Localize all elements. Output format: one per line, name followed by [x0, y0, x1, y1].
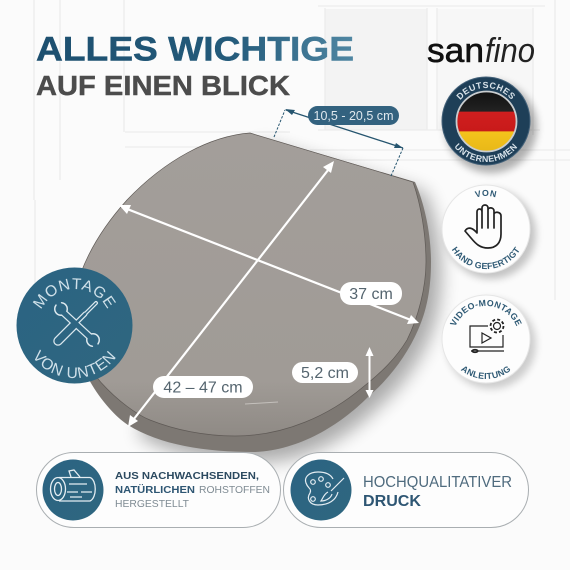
- icon: palette and brush: [306, 472, 344, 505]
- title: AUF EINEN BLICK: [36, 70, 290, 101]
- toilet seat: [72, 133, 441, 462]
- badge: Montage von unten: VON UNTEN: [35, 350, 116, 378]
- label: 42 – 47 cm: [153, 376, 253, 398]
- width dimension arrow: hinge distance: [274, 109, 403, 176]
- label: 37 cm: [340, 282, 402, 305]
- feature pill: Druck: DRUCK: [363, 493, 422, 510]
- pill text: HOCHQUALITATIVER: [363, 474, 512, 491]
- logo: sanfino: fino: [485, 32, 535, 70]
- pill text: NATÜRLICHEN: [115, 485, 195, 496]
- pill text: [115, 471, 270, 510]
- pill text: AUS NACHWACHSENDEN,: [115, 471, 259, 482]
- badge: Video-Montage Anleitung: VIDEO-MONTAGE: [450, 300, 522, 326]
- badge: Video-Montage Anleitung: ANLEITUNG: [460, 366, 510, 379]
- title: [36, 30, 354, 101]
- thickness arrow: [366, 347, 374, 398]
- badge: von Hand gefertigt: HAND GEFERTIGT: [452, 246, 519, 270]
- icon: video with gear: [470, 320, 504, 352]
- badge: von Hand gefertigt: VON: [474, 190, 496, 198]
- badge: Deutsches Unternehmen: DEUTSCHES: [456, 82, 515, 100]
- badge: Montage von unten: MONTAGE: [32, 278, 116, 309]
- badge: Montage von unten: [16, 268, 132, 384]
- logo: sanfino: [427, 32, 535, 70]
- label: 37 cm: 37 cm: [349, 286, 393, 303]
- badge: Deutsches Unternehmen: UNTERNEHMEN: [455, 143, 518, 162]
- badge: Video-Montage Anleitung: [442, 294, 539, 392]
- pill text: HERGESTELLT: [115, 499, 189, 510]
- feature pill: Rohstoffe: [36, 452, 280, 528]
- feature pill: Druck: [284, 452, 528, 528]
- icon: hand: [465, 205, 501, 248]
- icon: log: [50, 470, 95, 501]
- pill text: ROHSTOFFEN: [199, 485, 270, 496]
- label: 5,2 cm: 5,2 cm: [301, 365, 349, 382]
- label: 5,2 cm: [292, 362, 358, 383]
- title: ALLES WICHTIGE: [36, 30, 354, 68]
- logo: sanfino: san: [427, 32, 484, 70]
- badge: Deutsches Unternehmen: [440, 76, 542, 178]
- icon: wrench and screwdriver: [54, 302, 100, 347]
- label: 42 – 47 cm: 42 – 47 cm: [163, 380, 243, 396]
- label: 10,5 - 20,5 cm: 10,5 - 20,5 cm: [314, 108, 394, 123]
- white measurement arrows: [119, 161, 419, 427]
- badge: von Hand gefertigt: [442, 184, 540, 282]
